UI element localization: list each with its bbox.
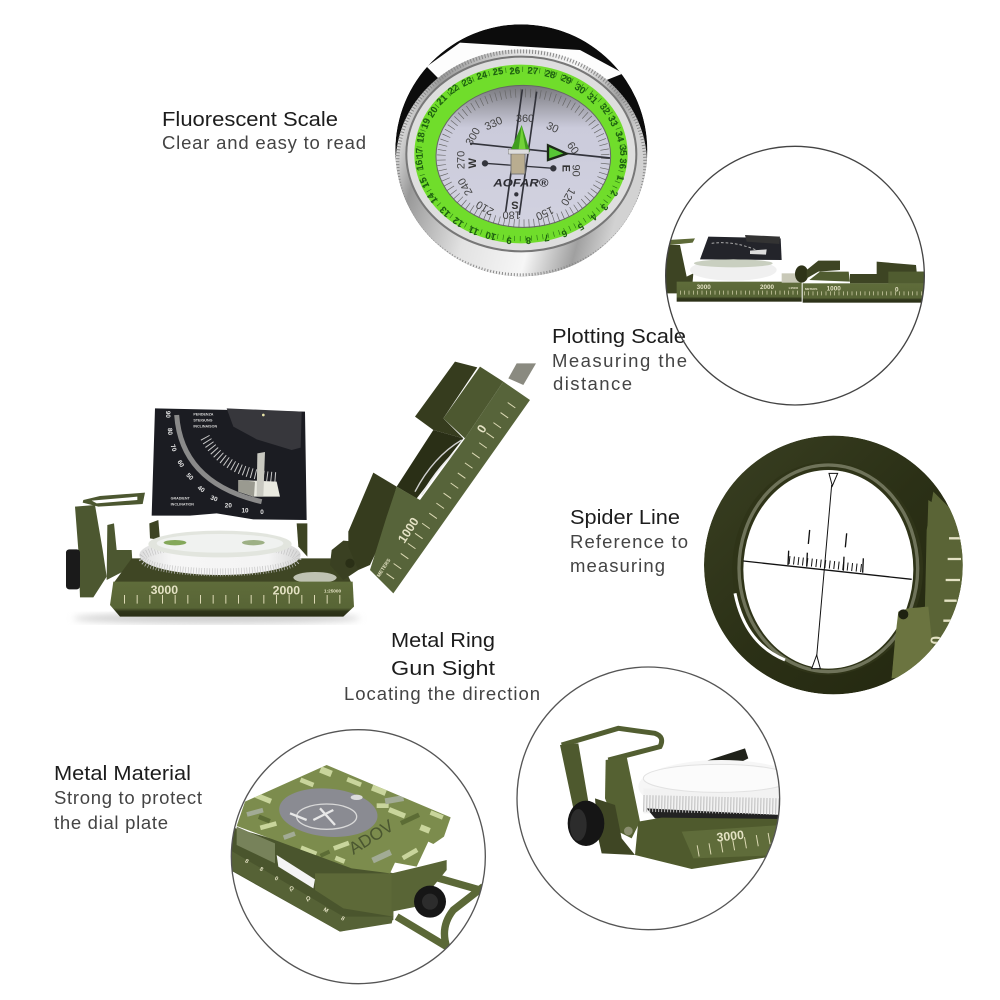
green ring numbers: 20	[426, 105, 441, 120]
green ring numbers: 7	[543, 231, 550, 243]
panel: plotting scale circle	[665, 146, 926, 405]
green ring numbers: 6	[559, 227, 569, 239]
brand: AOFAR®	[492, 177, 549, 189]
base right	[803, 283, 926, 303]
scale marks on the right rim	[943, 538, 961, 621]
heading: plotting scale: Plotting Scale	[552, 325, 686, 348]
green ring numbers: 26	[509, 66, 521, 77]
heading: metal material: the dial plate	[54, 812, 168, 833]
base	[635, 818, 782, 869]
dial numbers: 150	[534, 203, 555, 222]
panel: metal material close-up circle: Q	[288, 885, 295, 893]
heading: metal ring gun sight: Gun Sight	[391, 657, 495, 680]
dial numbers: 30	[544, 120, 560, 136]
icon: main compass with open cover: 3000	[151, 583, 178, 597]
green ring numbers: 16	[414, 158, 427, 171]
green ring numbers: 35	[617, 145, 628, 157]
heading: plotting scale: distance	[553, 373, 632, 394]
inclinometer plate	[152, 408, 307, 520]
dial numbers: 360	[516, 113, 534, 125]
dial numbers: 90	[570, 165, 582, 177]
green ring numbers: 19	[419, 116, 434, 131]
green ring numbers: 4	[587, 211, 599, 223]
panel: metal material close-up circle	[230, 730, 485, 984]
green ring numbers: 5	[575, 220, 586, 233]
panel: metal material close-up circle: 0	[273, 876, 279, 883]
front scale	[110, 582, 354, 617]
dial numbers: W	[467, 158, 479, 169]
green ring numbers: 33	[605, 114, 620, 129]
green ring numbers: 21	[435, 92, 450, 108]
hinged cover: 1000	[395, 515, 422, 546]
panel: metal material close-up circle: 8	[244, 858, 249, 865]
small bubble	[293, 572, 337, 583]
panel: plotting scale circle: 0	[895, 287, 899, 294]
inclinometer plate: GRADIENT	[171, 496, 191, 500]
icon: main compass with open cover	[66, 362, 536, 624]
dial numbers: 120	[558, 186, 577, 207]
icon: main compass with open cover: 2000	[273, 583, 300, 597]
hinged cover: METERS	[376, 557, 393, 578]
green ring numbers: 15	[418, 175, 432, 190]
green ring numbers: 11	[466, 223, 481, 237]
green ring numbers: 1	[614, 174, 626, 183]
green ring numbers: 25	[492, 66, 505, 78]
green ring numbers: 32	[597, 102, 612, 117]
panel: gun sight close-up circle: 3000	[716, 828, 745, 845]
inclinometer plate: 0	[260, 509, 264, 516]
heading: metal ring gun sight: Metal Ring	[391, 629, 495, 652]
inclinometer plate	[700, 237, 782, 260]
green ring numbers: 18	[415, 131, 428, 144]
heading: metal material: Metal Material	[54, 762, 191, 785]
crystal	[690, 259, 777, 281]
green ring numbers: 30	[572, 82, 587, 97]
heading: fluorescent scale	[162, 108, 366, 153]
icon: main compass with open cover: 1:25000	[324, 589, 341, 594]
panel: spider line reticle: 0	[927, 636, 944, 645]
hinge	[795, 265, 808, 283]
panel: plotting scale circle: 1000	[827, 286, 841, 293]
green ring numbers: 12	[451, 214, 466, 229]
dial numbers: 330	[483, 115, 505, 133]
sight frame	[562, 728, 662, 760]
scale ticks	[680, 290, 798, 295]
glass window	[279, 788, 378, 837]
green ring numbers: 10	[484, 229, 498, 242]
inclinometer plate: 50	[184, 472, 195, 482]
panel: spider line reticle	[704, 436, 965, 694]
inclinometer plate: INCLINAISON	[193, 424, 217, 428]
bezel	[139, 535, 301, 575]
green ring numbers: 34	[612, 130, 626, 144]
knob	[414, 886, 446, 918]
green ring numbers: 13	[437, 203, 453, 219]
heading: plotting scale	[552, 325, 687, 394]
heading: spider line: measuring	[570, 555, 665, 576]
panel: metal material close-up circle: Q	[304, 895, 312, 903]
green ring numbers: 2	[607, 188, 620, 198]
heading: spider line	[570, 506, 688, 576]
inclinometer plate: 60	[176, 459, 185, 469]
direction arrow	[548, 145, 567, 160]
inclinometer plate: PENDENZA	[193, 412, 214, 416]
plate hinges	[149, 520, 160, 540]
inclinometer plate: 20	[225, 503, 232, 510]
panel: metal material close-up circle: M	[322, 907, 329, 915]
panel: plotting scale circle: 2000	[760, 284, 775, 291]
dial numbers: 180	[503, 209, 521, 221]
heading: fluorescent scale: Fluorescent Scale	[162, 108, 338, 131]
panel: plotting scale circle: METERS	[805, 287, 817, 291]
inclinometer plate: 80	[166, 428, 173, 436]
adjustment knob	[66, 549, 80, 589]
green ring numbers: 31	[584, 91, 600, 107]
sighting lines	[470, 89, 610, 215]
heading: spider line: Spider Line	[570, 506, 680, 529]
dial numbers: S	[511, 199, 519, 211]
panel: metal material close-up circle: 8	[340, 916, 345, 923]
heading: fluorescent scale: Clear and easy to read	[162, 132, 366, 153]
inclinometer plate: 40	[196, 485, 206, 495]
compass body	[230, 827, 393, 932]
green ring numbers: 3	[598, 201, 610, 213]
main hinge	[330, 541, 367, 580]
green ring numbers: 8	[525, 234, 531, 245]
panel: metal material close-up circle: ADOV	[345, 815, 397, 858]
green ring numbers: 22	[446, 82, 461, 98]
heading: metal ring gun sight	[344, 629, 540, 704]
inclinometer plate: STEIGUNG	[193, 418, 213, 422]
compass base top	[113, 558, 352, 583]
north needle	[510, 125, 530, 152]
heading: metal material: Strong to protect	[54, 787, 202, 808]
green ring numbers: 14	[425, 190, 441, 205]
green ring numbers: 23	[460, 75, 475, 90]
inclinometer plate: 30	[209, 494, 219, 504]
knob	[568, 801, 604, 846]
dial numbers: 210	[474, 198, 496, 217]
dial numbers: 270	[456, 151, 468, 169]
green ring numbers	[414, 66, 628, 246]
dial numbers: 240	[456, 176, 476, 197]
green ring numbers: 28	[543, 68, 557, 82]
green ring numbers: 27	[527, 66, 539, 77]
inclinometer plate: INCLINATION	[171, 503, 194, 507]
green ring numbers: 24	[475, 69, 489, 83]
cover walls	[807, 261, 840, 278]
dial numbers	[456, 113, 582, 222]
dial face	[436, 85, 611, 227]
sight strut	[397, 877, 483, 947]
folding sight	[75, 493, 145, 597]
crosshair	[743, 473, 912, 669]
green ring numbers: 36	[616, 158, 628, 170]
heading: metal ring gun sight: Locating the direction	[344, 683, 540, 704]
hinged cover: 0	[474, 422, 490, 436]
inclinometer plate: 10	[241, 507, 249, 514]
panel: plotting scale circle: 3000	[697, 284, 711, 291]
green luminous ring	[414, 65, 628, 243]
inclinometer plate: 90	[164, 411, 171, 418]
green ring numbers: 9	[505, 234, 512, 246]
heading: metal material	[54, 762, 202, 833]
dial numbers: E	[560, 165, 572, 172]
heading: plotting scale: Measuring the	[552, 350, 687, 371]
dial numbers: 300	[464, 126, 483, 148]
panel: metal material close-up circle: 8	[258, 866, 264, 873]
panel: gun sight close-up circle	[517, 667, 805, 930]
side hinge	[392, 860, 447, 912]
crystal	[638, 760, 778, 795]
icon: fluorescent compass dial	[395, 24, 647, 277]
green ring numbers: 17	[414, 148, 426, 159]
left sight	[668, 238, 695, 245]
heading: spider line: Reference to	[570, 531, 688, 552]
hinged cover	[348, 362, 536, 593]
white lens	[743, 470, 913, 669]
green ring numbers: 29	[559, 73, 574, 88]
dial numbers: 60	[564, 140, 581, 157]
panel: plotting scale circle: 1:25000	[788, 286, 799, 290]
ground shadow	[73, 613, 360, 624]
base left	[677, 282, 802, 302]
inclinometer plate: 70	[169, 444, 178, 453]
camouflage lid	[237, 765, 451, 873]
